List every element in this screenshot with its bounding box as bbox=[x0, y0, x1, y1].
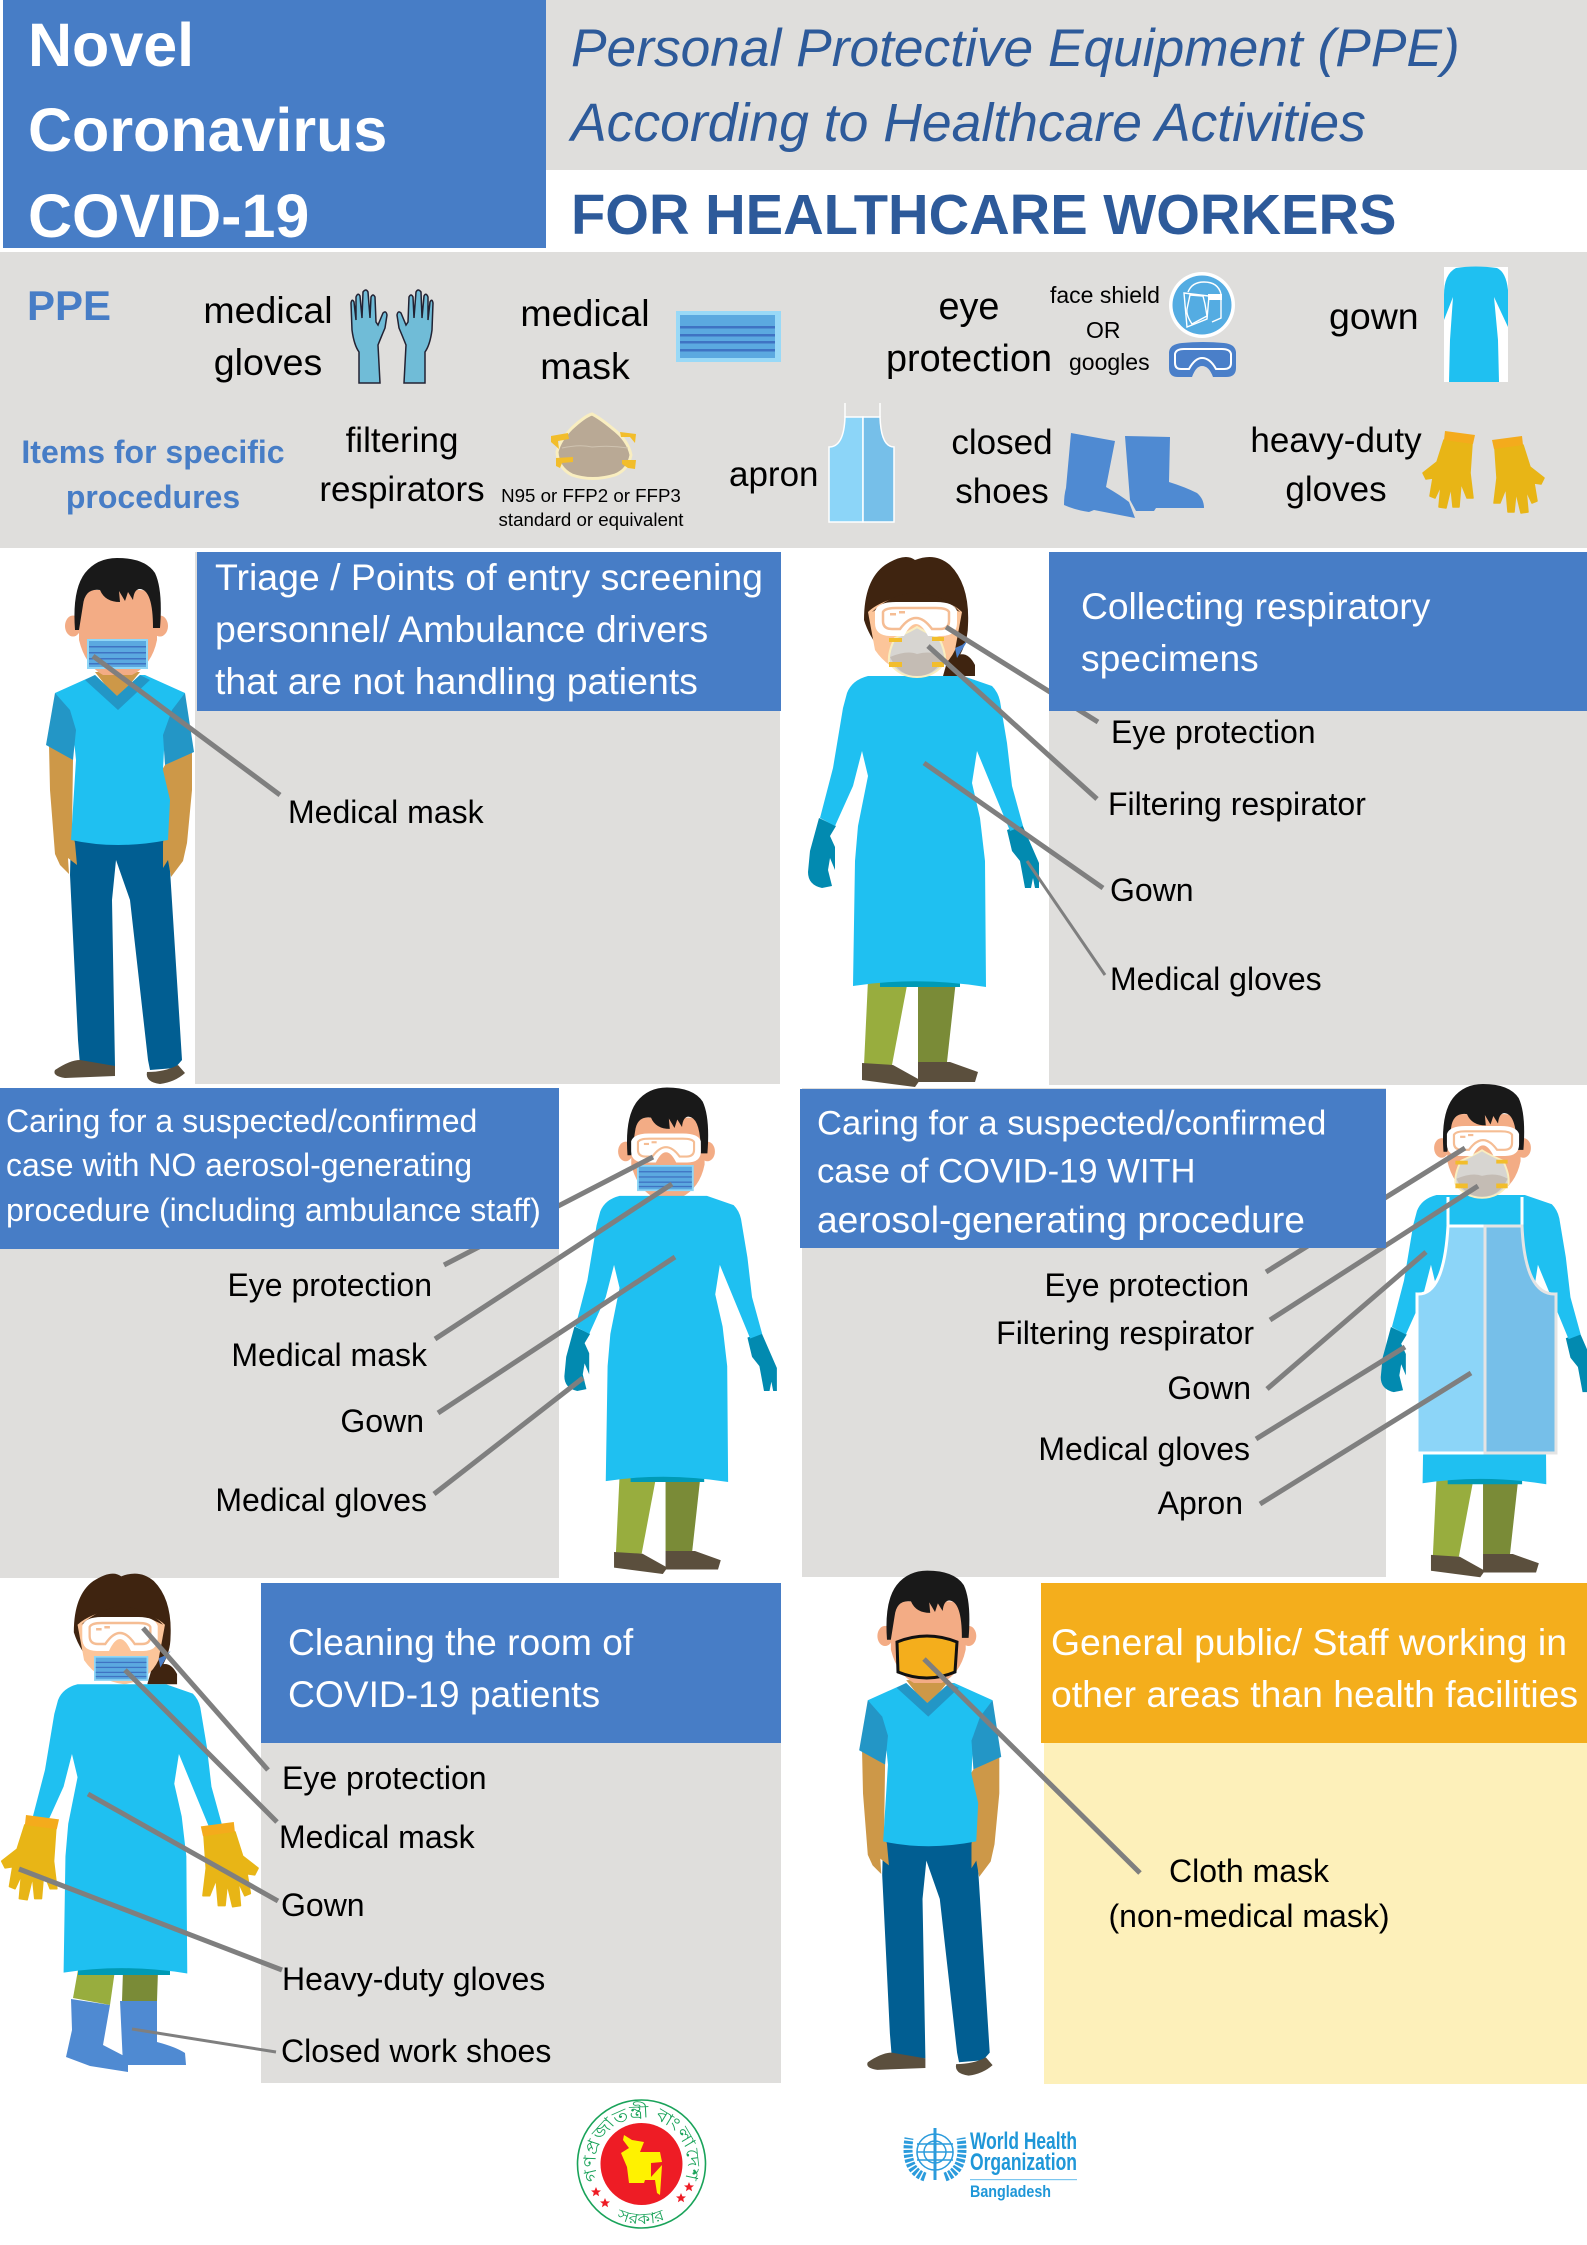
labels: Gown bbox=[281, 1887, 365, 1923]
leader lines bbox=[434, 1157, 675, 1494]
header box bbox=[0, 1088, 559, 1249]
leader line bbox=[924, 1659, 1140, 1873]
header box: Cleaning the room of bbox=[288, 1621, 634, 1663]
panel background bbox=[261, 1583, 781, 2083]
WHO wordmark: World Health bbox=[970, 2128, 1077, 2155]
logo: government of Bangladesh emblem: সরকার bbox=[618, 2210, 664, 2224]
header: title block bbox=[3, 0, 546, 250]
leader lines bbox=[1256, 1148, 1478, 1504]
legend heading: PPE: PPE bbox=[27, 282, 111, 329]
label: medical mask: medical bbox=[520, 292, 650, 334]
header box: Triage / Points of entry screening bbox=[215, 556, 763, 598]
title background bbox=[3, 0, 546, 248]
label: closed shoes: shoes bbox=[955, 472, 1049, 511]
label: respirator standard: N95 or FFP2 or FFP3 bbox=[501, 485, 681, 506]
labels: Eye protection bbox=[227, 1267, 432, 1303]
label: gown: gown bbox=[1329, 295, 1419, 337]
header box: procedure (including ambulance staff) bbox=[6, 1192, 541, 1228]
header box: Caring for a suspected/confirmed bbox=[817, 1104, 1326, 1142]
labels: Filtering respirator bbox=[996, 1315, 1254, 1351]
header box: Caring for a suspected/confirmed bbox=[6, 1103, 477, 1139]
panel background bbox=[195, 552, 780, 1084]
label: filtering respirators: filtering bbox=[346, 421, 458, 460]
icon: medical mask bbox=[676, 311, 781, 362]
labels: Filtering respirator bbox=[1108, 786, 1366, 822]
label: closed shoes: closed bbox=[951, 423, 1053, 462]
label: medical gloves: medical bbox=[203, 289, 333, 331]
label: eye protection: protection bbox=[886, 338, 1052, 380]
icon: gown bbox=[1444, 266, 1508, 382]
label: (non-medical mask) bbox=[1109, 1898, 1389, 1934]
label: heavy-duty gloves: gloves bbox=[1285, 470, 1387, 509]
title: COVID-19 bbox=[28, 182, 309, 250]
panel: general public bbox=[859, 1571, 1587, 2084]
header box: personnel/ Ambulance drivers bbox=[215, 608, 708, 650]
labels: Gown bbox=[1167, 1370, 1251, 1406]
panel: PPE legend bbox=[0, 252, 1587, 548]
header box bbox=[197, 552, 781, 711]
labels: Apron bbox=[1158, 1485, 1243, 1521]
panel: caring with aerosol-generating procedure bbox=[800, 1084, 1587, 1577]
subtitle background bbox=[546, 0, 1587, 170]
icon: face shield bbox=[1169, 272, 1235, 338]
header box: Collecting respiratory bbox=[1081, 585, 1431, 627]
icon: filtering respirator bbox=[551, 414, 636, 478]
leader line: medical mask bbox=[93, 656, 280, 795]
labels: Medical gloves bbox=[1038, 1431, 1250, 1467]
header box: other areas than health facilities bbox=[1051, 1673, 1578, 1715]
header: subtitle bbox=[546, 0, 1587, 170]
labels: Medical mask bbox=[279, 1819, 476, 1855]
labels: Medical gloves bbox=[1110, 961, 1322, 997]
panel: collecting respiratory specimens bbox=[808, 552, 1587, 1087]
subtitle text: According to Healthcare Activities bbox=[568, 94, 1366, 153]
label: face shield or googles: face shield bbox=[1050, 282, 1160, 308]
subtitle text: Personal Protective Equipment (PPE) bbox=[571, 19, 1460, 78]
figure: man in gown with goggles and medical mask bbox=[564, 1088, 777, 1574]
label: filtering respirators: respirators bbox=[319, 470, 485, 509]
label: medical gloves: gloves bbox=[214, 341, 322, 383]
header box bbox=[1041, 1583, 1587, 1743]
label: medical mask: Medical mask bbox=[288, 794, 485, 830]
WHO wordmark: Organization bbox=[970, 2149, 1077, 2176]
labels: Closed work shoes bbox=[281, 2033, 551, 2069]
icon: heavy-duty gloves bbox=[1423, 431, 1544, 513]
labels: Medical gloves bbox=[215, 1482, 427, 1518]
label: Cloth mask bbox=[1169, 1853, 1330, 1889]
leader lines bbox=[924, 627, 1105, 975]
icon: goggles bbox=[1169, 342, 1236, 377]
panel background bbox=[802, 1088, 1386, 1577]
figure: woman in gown with goggles and respirator bbox=[808, 557, 1039, 1087]
labels: Heavy-duty gloves bbox=[282, 1961, 545, 1997]
panel: cleaning the room bbox=[2, 1574, 781, 2083]
label: face shield or googles: googles bbox=[1069, 349, 1150, 375]
labels: Eye protection bbox=[1111, 714, 1316, 750]
leader lines bbox=[19, 1628, 282, 2052]
panel: triage bbox=[46, 552, 781, 1084]
title: Novel bbox=[28, 11, 194, 79]
icon: closed shoes bbox=[1064, 433, 1204, 518]
label: eye protection: eye bbox=[939, 286, 999, 328]
figure: man in gown with apron, goggles and respirator bbox=[1381, 1084, 1587, 1577]
labels: Eye protection bbox=[1044, 1267, 1249, 1303]
WHO wordmark: Bangladesh bbox=[970, 2182, 1051, 2201]
header box: General public/ Staff working in bbox=[1051, 1621, 1567, 1663]
label: heavy-duty gloves: heavy-duty bbox=[1250, 421, 1422, 460]
header box bbox=[800, 1089, 1386, 1248]
figure: man with cloth mask bbox=[859, 1571, 1001, 2076]
labels: Gown bbox=[1110, 872, 1194, 908]
heading: for healthcare workers: FOR HEALTHCARE WORKERS bbox=[571, 183, 1396, 246]
panel background bbox=[1049, 552, 1587, 1085]
legend heading: items for specific procedures: procedures bbox=[66, 479, 240, 515]
header box bbox=[261, 1583, 781, 1743]
figure: man with medical mask bbox=[46, 558, 194, 1084]
labels: Medical mask bbox=[231, 1337, 428, 1373]
legs and boots bbox=[66, 1970, 186, 2072]
WHO emblem bbox=[908, 2128, 962, 2180]
label: face shield or googles: OR bbox=[1086, 317, 1120, 343]
cloth mask bbox=[897, 1636, 957, 1678]
header box: case with NO aerosol-generating bbox=[6, 1147, 472, 1183]
header box: that are not handling patients bbox=[215, 660, 698, 702]
labels: Eye protection bbox=[282, 1760, 487, 1796]
logo: government of Bangladesh emblem: গণপ্রজাতন্ত্রী বাংলাদেশ bbox=[583, 2101, 700, 2182]
logo: government of Bangladesh emblem bbox=[576, 2099, 706, 2229]
header box: case of COVID-19 WITH bbox=[817, 1152, 1196, 1190]
labels: Gown bbox=[340, 1403, 424, 1439]
header box: aerosol-generating procedure bbox=[817, 1198, 1305, 1240]
legend background bbox=[0, 252, 1587, 548]
logo: World Health Organization Bangladesh bbox=[908, 2128, 1077, 2201]
title: Coronavirus bbox=[28, 96, 387, 164]
panel background bbox=[1044, 1743, 1587, 2084]
legend heading: items for specific procedures: Items for specific bbox=[21, 434, 285, 470]
icon: apron bbox=[829, 403, 894, 522]
icon: medical gloves bbox=[351, 290, 433, 383]
header box: specimens bbox=[1081, 637, 1259, 679]
header box: COVID-19 patients bbox=[288, 1673, 600, 1715]
label: respirator standard: standard or equivalent bbox=[499, 509, 684, 530]
header box bbox=[1049, 552, 1587, 711]
label: apron: apron bbox=[729, 455, 819, 494]
apron bbox=[1417, 1197, 1556, 1453]
heavy-duty gloves on hands bbox=[2, 1815, 258, 1907]
label: medical mask: mask bbox=[540, 345, 630, 387]
panel: caring with no aerosol-generating procedure bbox=[0, 1088, 777, 1578]
panel background bbox=[0, 1088, 559, 1578]
figure: woman with heavy-duty gloves and boots bbox=[2, 1574, 258, 2072]
